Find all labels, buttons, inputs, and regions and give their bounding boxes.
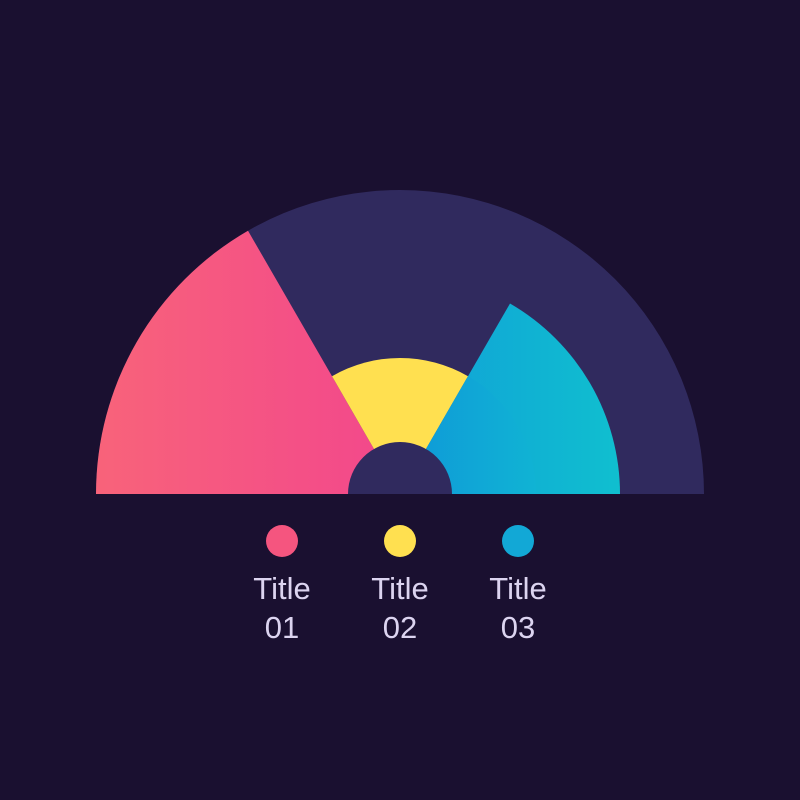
sector: teal inner band bbox=[400, 376, 536, 494]
legend item 03 bbox=[489, 525, 547, 645]
center circle bbox=[348, 442, 452, 494]
legend item 01 bbox=[253, 525, 311, 645]
legend item 01: 01 bbox=[265, 610, 299, 645]
sector: teal bbox=[400, 304, 620, 494]
outer ring background bbox=[96, 190, 704, 494]
legend item 02 bbox=[371, 525, 429, 645]
legend item 02: 02 bbox=[383, 610, 417, 645]
legend item 01: Title bbox=[253, 571, 311, 606]
legend item 03: Title bbox=[489, 571, 547, 606]
legend item 02: Title bbox=[371, 571, 429, 606]
sector: pink bbox=[96, 231, 400, 494]
legend bbox=[253, 525, 547, 645]
sector: yellow bbox=[332, 358, 468, 494]
legend item 03: 03 bbox=[501, 610, 535, 645]
chart: semicircle radial chart bbox=[96, 190, 704, 494]
